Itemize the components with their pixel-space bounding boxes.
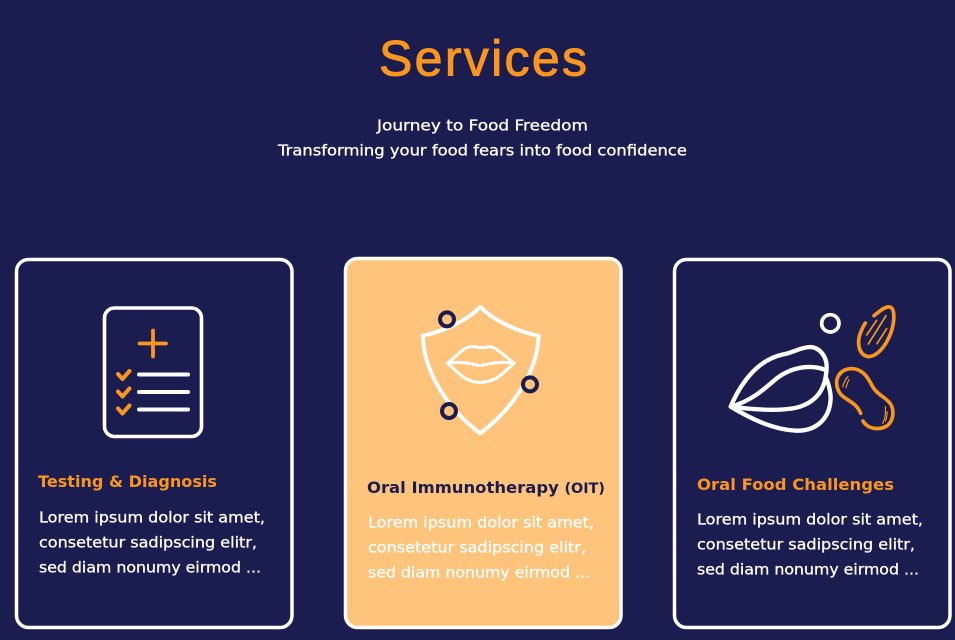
description: consetetur sadipscing elitr, <box>697 536 915 554</box>
description: Lorem ipsum dolor sit amet, <box>39 508 265 526</box>
heading: Oral Food Challenges <box>697 475 894 494</box>
panel: testing and diagnosis <box>16 260 292 628</box>
icon: nuts <box>731 307 894 431</box>
icon: shield with lips <box>423 307 539 433</box>
description: sed diam nonumy eirmod ... <box>368 564 590 582</box>
subtitle <box>277 116 687 160</box>
description: consetetur sadipscing elitr, <box>39 534 257 552</box>
icon: checklist document <box>104 308 202 436</box>
subtitle: Journey to Food Freedom <box>376 116 588 134</box>
description: sed diam nonumy eirmod ... <box>697 560 919 578</box>
description: consetetur sadipscing elitr, <box>368 538 586 556</box>
description: Lorem ipsum dolor sit amet, <box>697 510 923 528</box>
panel: oral immunotherapy <box>346 258 621 628</box>
heading: Oral Immunotherapy (OIT) <box>367 478 605 497</box>
panel: oral food challenges <box>674 260 950 628</box>
title: Services <box>379 30 587 86</box>
description: Lorem ipsum dolor sit amet, <box>368 514 594 532</box>
description <box>368 514 594 582</box>
description <box>697 510 923 578</box>
subtitle: Transforming your food fears into food confidence <box>277 142 687 160</box>
description <box>39 508 265 576</box>
description: sed diam nonumy eirmod ... <box>39 558 261 576</box>
heading: Testing & Diagnosis <box>38 472 217 491</box>
